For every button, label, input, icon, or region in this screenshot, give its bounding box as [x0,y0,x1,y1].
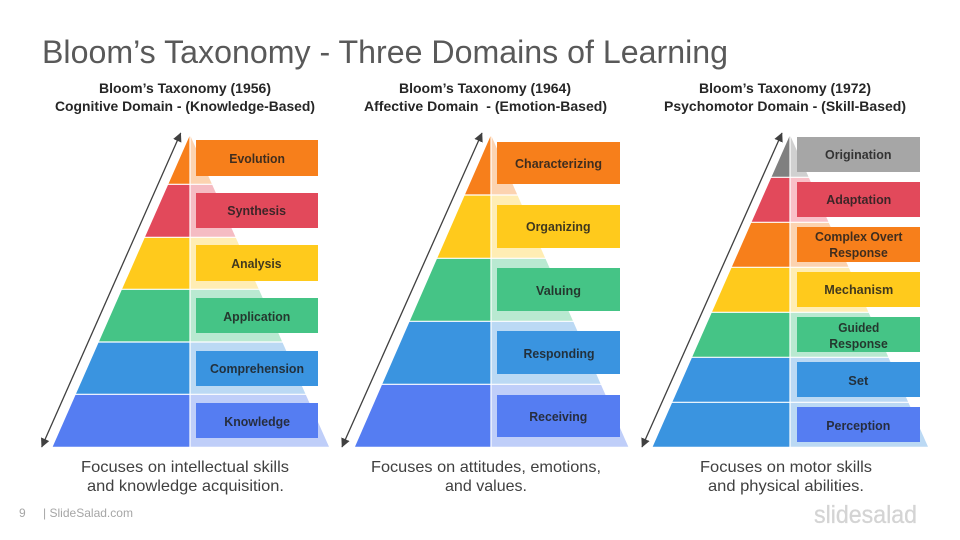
label: Complex Overt Response [797,227,920,262]
label: Analysis [196,245,318,281]
label: Set [797,362,920,397]
label: Comprehension [196,351,318,386]
label: Application: Application [223,309,290,324]
arrow: affective [342,133,482,447]
caption: cognitive: and knowledge acquisition. [87,478,284,495]
label: Responding: Responding [524,346,595,361]
caption: affective: Focuses on attitudes, emotions, [371,459,601,476]
label: Complex Overt Response: Response [829,245,888,260]
caption: psychomotor [700,459,872,495]
label: Mechanism: Mechanism [824,282,893,297]
label: Knowledge: Knowledge [224,414,290,429]
label: Perception: Perception [826,418,890,433]
heading: affective domain [364,80,607,114]
arrow: psychomotor [642,133,782,447]
label: Characterizing: Characterizing [515,156,602,171]
label: Characterizing [497,142,620,184]
caption: psychomotor: and physical abilities. [708,478,864,495]
label: Guided Response: Response [829,336,888,351]
caption: affective [371,459,601,495]
heading: affective domain: Bloom’s Taxonomy (1964) [399,80,571,96]
arrow: cognitive [42,133,181,447]
label: Valuing: Valuing [536,283,581,298]
label: Adaptation [797,182,920,217]
heading: psychomotor domain [664,80,906,114]
heading: psychomotor domain: Psychomotor Domain - (Skill-Based) [664,98,906,114]
label: Guided Response [797,317,920,352]
label: Perception [797,407,920,442]
caption: affective: and values. [445,478,527,495]
heading: cognitive domain: Bloom’s Taxonomy (1956) [99,80,271,96]
caption: cognitive: Focuses on intellectual skills [81,459,289,476]
pyramid: affective [355,135,628,447]
footer: page number and site: | SlideSalad.com [43,506,133,520]
label: Evolution: Evolution [229,151,285,166]
label: Complex Overt Response: Complex Overt [815,229,903,244]
label: Knowledge [196,403,318,438]
label: Receiving: Receiving [529,409,587,424]
label: Guided Response: Guided [838,320,879,335]
label: Responding [497,331,620,374]
label: Analysis: Analysis [231,256,282,271]
label: Organizing: Organizing [526,219,591,234]
label: Receiving [497,395,620,437]
panel: affective domain [342,80,628,495]
pyramid: cognitive [53,135,329,447]
label: Set: Set [848,373,869,388]
label: Comprehension: Comprehension [210,361,304,376]
label: Mechanism [797,272,920,307]
heading: cognitive domain [55,80,315,114]
caption: psychomotor: Focuses on motor skills [700,459,872,476]
title: Bloom’s Taxonomy - Three Domains of Learning [42,34,728,70]
heading: psychomotor domain: Bloom’s Taxonomy (1972) [699,80,871,96]
logo: slidesalad: slidesalad [814,501,917,529]
pyramid: psychomotor [653,135,928,447]
panel: psychomotor domain [642,80,928,495]
heading: affective domain: Affective Domain - (Emotion-Based) [364,98,607,114]
label: Synthesis: Synthesis [227,203,286,218]
footer: page number and site: 9 [19,506,26,520]
panel: cognitive domain [42,80,329,495]
label: Evolution [196,140,318,176]
label: Synthesis [196,193,318,228]
heading: cognitive domain: Cognitive Domain - (Knowledge-Based) [55,98,315,114]
label: Origination [797,137,920,172]
label: Valuing [497,268,620,311]
label: Application [196,298,318,333]
label: Adaptation: Adaptation [826,192,891,207]
label: Organizing [497,205,620,248]
caption: cognitive [81,459,289,495]
label: Origination: Origination [825,147,892,162]
